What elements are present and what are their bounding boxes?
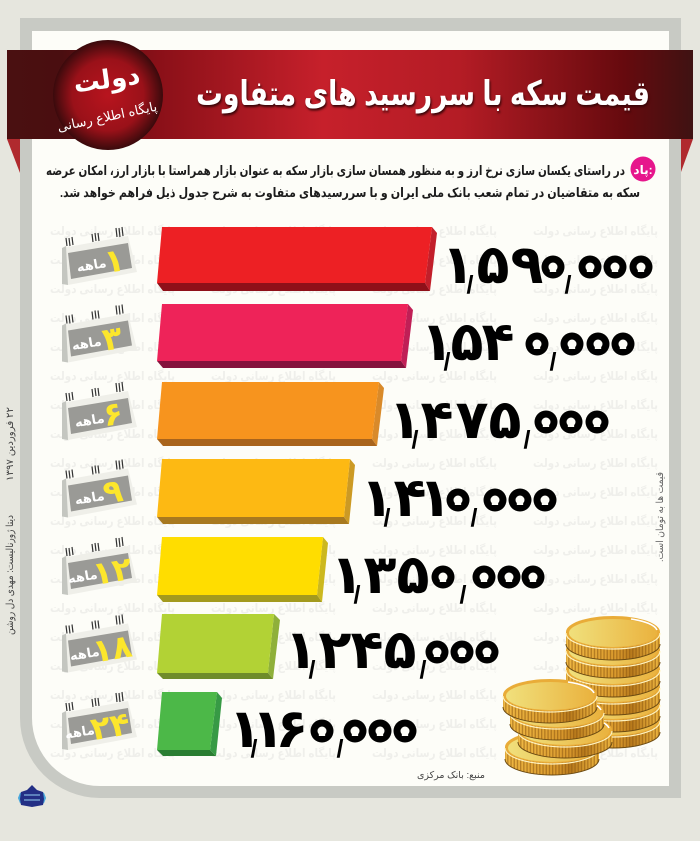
value 5: ۵	[397, 545, 429, 605]
row 5: 12 months	[62, 537, 544, 609]
value 2: ۰	[612, 323, 634, 364]
source note: منبع: بانک مرکزی	[417, 770, 485, 781]
calendar 6	[62, 614, 137, 673]
value 4: ۰	[534, 479, 556, 520]
row 2: 3 months	[62, 304, 634, 376]
calendar 5	[62, 537, 137, 596]
note badge: پاد:	[633, 163, 653, 177]
value 5: ۰	[498, 556, 520, 597]
bar 5	[157, 537, 328, 602]
calendar 2: ۳	[100, 319, 125, 358]
side note: currency: قیمت ها به تومان است.	[655, 472, 666, 562]
calendar 6: ۱۸	[90, 627, 135, 669]
bar 3	[157, 382, 384, 446]
value 3	[389, 390, 608, 454]
value 3: ۱	[389, 390, 421, 450]
value 7: ۶	[276, 699, 308, 759]
value 6: ۲	[319, 620, 352, 680]
value 5: /	[354, 581, 361, 609]
value 7: ۰	[369, 710, 391, 751]
calendar 2	[62, 304, 137, 363]
calendar 1: ماهه	[76, 255, 107, 275]
value 2: ۰	[526, 323, 548, 364]
value 1: ۰	[604, 246, 626, 287]
value 4: ۰	[509, 479, 531, 520]
value 6: /	[309, 656, 316, 684]
value 7: ۰	[311, 710, 333, 751]
value 2: ۵	[451, 312, 483, 372]
value 1: ۰	[630, 246, 652, 287]
value 5: ۰	[432, 556, 454, 597]
value 1: ۱	[442, 235, 474, 295]
calendar 2: ماهه	[71, 333, 103, 353]
value 4: /	[384, 504, 391, 532]
row 3: 6 months	[62, 382, 608, 454]
header ribbon	[7, 50, 693, 173]
value 3: ۴	[421, 390, 453, 450]
bar 7	[157, 692, 222, 756]
value 5: ۰	[522, 556, 544, 597]
value 2: /	[550, 348, 557, 376]
calendar 3	[62, 382, 137, 440]
bar 2	[157, 304, 413, 368]
value 7: ۱	[229, 699, 261, 759]
calendar 6: ماهه	[69, 644, 101, 663]
value 5: ۰	[473, 556, 495, 597]
bar 4	[157, 459, 355, 524]
value 3: ۰	[560, 401, 582, 442]
value 1: /	[467, 271, 474, 299]
value 6: /	[420, 656, 427, 684]
calendar 3: ۶	[100, 394, 125, 433]
value 3: ۰	[535, 401, 557, 442]
calendar 7	[62, 692, 137, 752]
logo disc: دولت	[72, 60, 142, 100]
logo disc: پایگاه اطلاع رسانی	[56, 99, 159, 135]
value 3: /	[412, 426, 419, 454]
value 2: ۰	[587, 323, 609, 364]
value 4: /	[471, 504, 478, 532]
value 4: ۴	[394, 468, 426, 528]
value 1	[442, 235, 652, 299]
value 6	[285, 620, 498, 684]
value 4: ۰	[447, 479, 469, 520]
value 1: ۵	[477, 235, 509, 295]
calendar 7: ماهه	[64, 722, 96, 742]
calendar 1	[62, 227, 137, 285]
value 1: ۰	[579, 246, 601, 287]
value 6: ۱	[285, 620, 317, 680]
side note: journalist: دیتا ژورنالیست: مهدی دل روشن	[5, 515, 16, 635]
value 7: ۰	[344, 710, 366, 751]
bar 6	[157, 614, 280, 679]
value 4	[361, 468, 556, 532]
value 6: ۰	[426, 631, 448, 672]
value 2	[421, 312, 634, 376]
bar 1	[157, 227, 437, 291]
value 7: /	[337, 735, 344, 763]
value 3: ۷	[456, 390, 489, 450]
value 1: ۰	[542, 246, 564, 287]
watermark pattern	[45, 215, 665, 765]
calendar 5: ۱۲	[90, 550, 135, 592]
row 7: 24 months	[62, 692, 417, 763]
side note: date: ۲۲ فروردین ۱۳۹۷	[5, 407, 16, 481]
value 2: /	[444, 348, 451, 376]
value 2: ۱	[421, 312, 453, 372]
calendar 5: ماهه	[67, 567, 99, 586]
row 4: 9 months	[62, 459, 556, 532]
intro text block	[46, 156, 656, 201]
value 3: ۰	[586, 401, 608, 442]
value 6: ۴	[351, 620, 383, 680]
row 6: 18 months	[62, 614, 498, 684]
value 2: ۰	[561, 323, 583, 364]
value 5: ۳	[364, 545, 397, 605]
value 4: ۱	[361, 468, 393, 528]
logo disc	[53, 40, 163, 150]
note badge	[630, 156, 656, 182]
value 5: /	[460, 581, 467, 609]
value 5	[331, 545, 544, 609]
value 7: ۰	[394, 710, 416, 751]
value 5: ۱	[331, 545, 363, 605]
value 1: /	[565, 271, 572, 299]
value 3: ۵	[489, 390, 521, 450]
calendar 1: ۱	[102, 241, 127, 280]
value 7: /	[251, 735, 258, 763]
calendar 4: ماهه	[74, 488, 106, 508]
value 6: ۰	[451, 631, 473, 672]
value 3: /	[524, 426, 531, 454]
calendar 4	[62, 460, 137, 518]
icon: publisher seal	[19, 785, 45, 807]
coin stacks illustration	[503, 616, 660, 775]
value 2: ۴	[482, 312, 514, 372]
value 6: ۰	[476, 631, 498, 672]
row 1: 1 month	[62, 227, 652, 299]
calendar 7: ۲۴	[88, 705, 132, 747]
value 7: ۱	[252, 699, 284, 759]
value 4: ۰	[484, 479, 506, 520]
value 6: ۵	[384, 620, 416, 680]
value 4: ۱	[419, 468, 451, 528]
value 1: ۹	[511, 235, 543, 295]
calendar 4: ۹	[100, 472, 125, 511]
calendar 3: ماهه	[74, 410, 106, 430]
value 7	[229, 699, 416, 763]
